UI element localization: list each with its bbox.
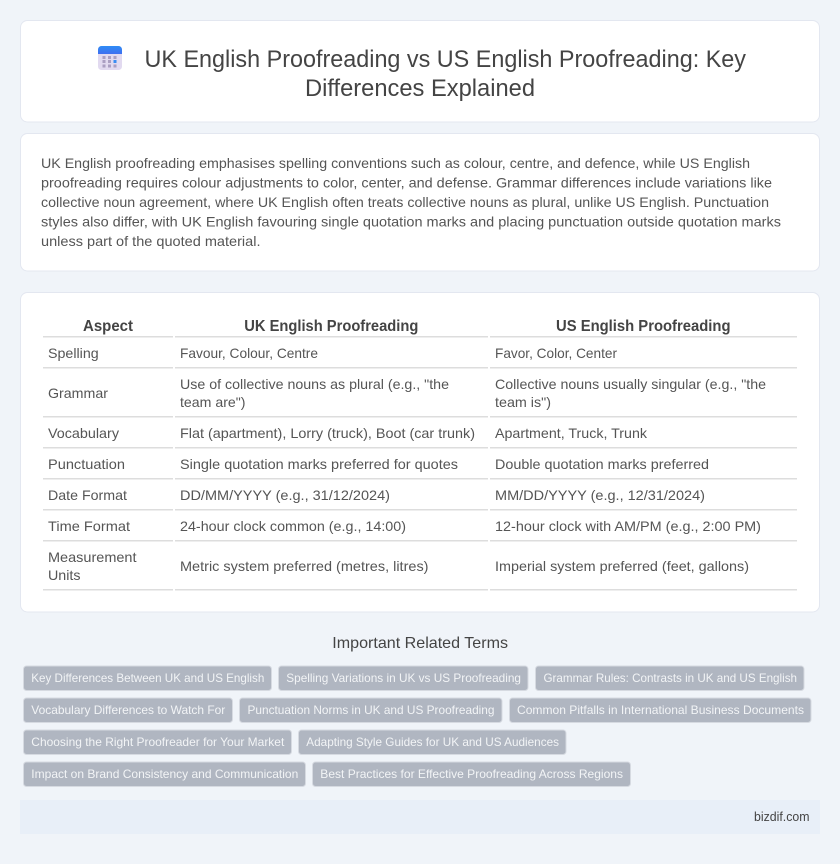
text block: summary paragraph: unless part of the quoted material. xyxy=(41,233,260,249)
text block: summary paragraph: styles also differ, with UK English favouring single quotation marks and placing punctuation outside quotation marks xyxy=(41,214,781,230)
row: date format: Date Format xyxy=(48,487,127,503)
panel: description xyxy=(20,134,820,271)
row: measurement units: Units xyxy=(48,567,80,583)
footer source label: bizdif.com xyxy=(754,810,810,824)
tag: key differences: Key Differences Between UK and US English xyxy=(31,671,264,685)
row: spelling: Favor, Color, Center xyxy=(495,345,617,361)
row: measurement units: Measurement xyxy=(48,549,137,565)
tag: choosing the right proofreader: Choosing the Right Proofreader for Your Market xyxy=(31,735,285,749)
row: grammar: team are") xyxy=(180,394,246,410)
row: measurement units: Metric system preferred (metres, litres) xyxy=(180,558,428,574)
row: measurement units: Imperial system preferred (feet, gallons) xyxy=(495,558,749,574)
tag: impact on brand consistency: Impact on Brand Consistency and Communication xyxy=(31,767,298,781)
row: grammar: team is") xyxy=(495,394,551,410)
row: date format xyxy=(48,487,705,503)
tag: vocabulary differences: Vocabulary Differences to Watch For xyxy=(31,703,225,717)
row: vocabulary: Apartment, Truck, Trunk xyxy=(495,425,648,441)
tag: punctuation norms: Punctuation Norms in UK and US Proofreading xyxy=(248,703,494,717)
panel: header xyxy=(20,20,820,122)
row: spelling: Favour, Colour, Centre xyxy=(180,345,318,361)
tag: best practices xyxy=(312,762,630,786)
tag: punctuation norms xyxy=(240,698,502,722)
panel: comparison table xyxy=(20,292,820,612)
icon: calendar xyxy=(98,46,122,70)
tag: grammar rules xyxy=(536,666,804,690)
text block: summary paragraph: proofreading requires colour adjustments to color, center, and defense. Grammar differences include variations like xyxy=(41,174,772,190)
tag: impact on brand consistency xyxy=(24,762,306,786)
row: spelling xyxy=(48,345,617,361)
tag: adapting style guides: Adapting Style Guides for UK and US Audiences xyxy=(306,735,559,749)
title: UK English Proofreading vs US English Proofreading: Key xyxy=(144,46,746,73)
row: time format xyxy=(48,518,761,534)
footer bar xyxy=(20,800,820,834)
tag: key differences xyxy=(24,666,272,690)
tag: vocabulary differences xyxy=(24,698,232,722)
row: date format: MM/DD/YYYY (e.g., 12/31/2024) xyxy=(495,487,705,503)
text block: summary paragraph: UK English proofreading emphasises spelling conventions such as colour, centre, and defence, while US English xyxy=(41,155,750,171)
row: vocabulary xyxy=(48,425,648,441)
row: measurement units xyxy=(48,549,749,583)
row: grammar: Collective nouns usually singular (e.g., "the xyxy=(495,376,766,392)
table header row: UK English Proofreading xyxy=(244,318,418,335)
row: grammar xyxy=(48,376,766,410)
row: punctuation: Double quotation marks preferred xyxy=(495,456,709,472)
text block: summary paragraph xyxy=(41,155,781,249)
tag: spelling variations: Spelling Variations in UK vs US Proofreading xyxy=(286,671,521,685)
title: Differences Explained xyxy=(305,75,535,102)
row: time format: Time Format xyxy=(48,518,130,534)
row: vocabulary: Vocabulary xyxy=(48,425,119,441)
tag: adapting style guides xyxy=(298,730,566,754)
row: time format: 12-hour clock with AM/PM (e.g., 2:00 PM) xyxy=(495,518,761,534)
table header row: US English Proofreading xyxy=(556,318,730,335)
title xyxy=(144,46,746,102)
section: related terms xyxy=(24,635,811,786)
heading: important related terms: Important Related Terms xyxy=(332,635,508,652)
row: punctuation xyxy=(48,456,709,472)
tag: grammar rules: Grammar Rules: Contrasts in UK and US English xyxy=(544,671,797,685)
row: punctuation: Single quotation marks preferred for quotes xyxy=(180,456,458,472)
tag: common pitfalls: Common Pitfalls in International Business Documents xyxy=(517,703,804,717)
tag: best practices: Best Practices for Effective Proofreading Across Regions xyxy=(320,767,623,781)
text block: summary paragraph: collective noun agreement, where UK English often treats collective nouns as plural, unlike US English. Punctuation xyxy=(41,194,769,210)
row: grammar: Use of collective nouns as plural (e.g., "the xyxy=(180,376,449,392)
row: spelling: Spelling xyxy=(48,345,99,361)
row: grammar: Grammar xyxy=(48,385,108,401)
tag: spelling variations xyxy=(278,666,528,690)
row: punctuation: Punctuation xyxy=(48,456,125,472)
row: vocabulary: Flat (apartment), Lorry (truck), Boot (car trunk) xyxy=(180,425,475,441)
row: date format: DD/MM/YYYY (e.g., 31/12/2024) xyxy=(180,487,390,503)
table header row: Aspect xyxy=(83,318,134,335)
table header row xyxy=(83,318,730,335)
tag: choosing the right proofreader xyxy=(24,730,292,754)
row: time format: 24-hour clock common (e.g., 14:00) xyxy=(180,518,406,534)
tag: common pitfalls xyxy=(510,698,811,722)
